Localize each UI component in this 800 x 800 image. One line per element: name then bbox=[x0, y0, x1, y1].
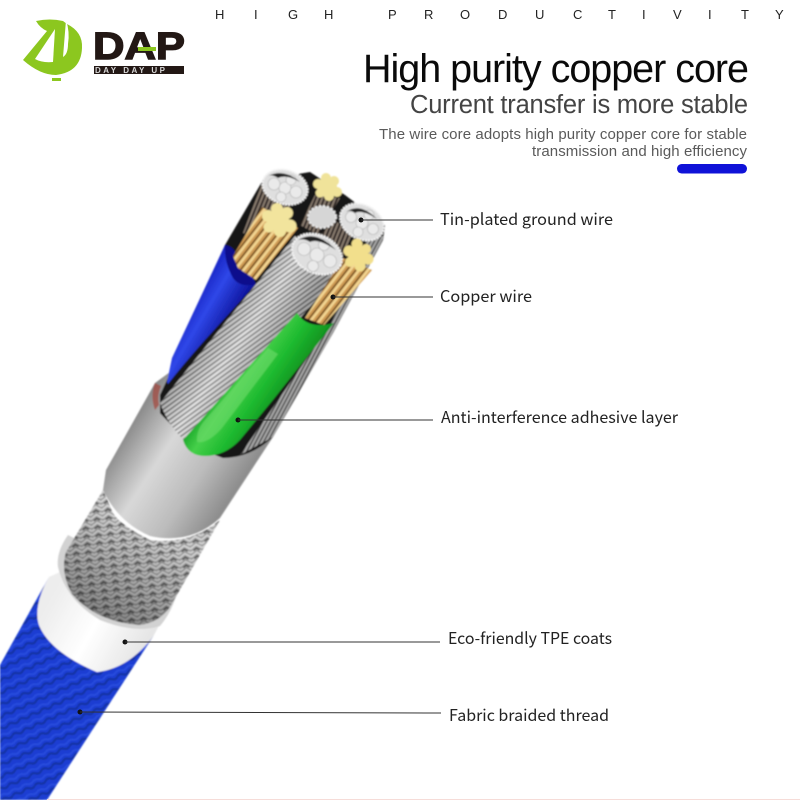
mesh shadow bbox=[64, 490, 220, 625]
logo tagline bar: DAY DAY UP bbox=[95, 66, 166, 75]
metal mesh shield bbox=[64, 490, 220, 625]
right twisted shielding strands bbox=[240, 230, 384, 455]
wire: blue insulation bbox=[167, 245, 256, 384]
green wire highlight bbox=[197, 348, 278, 442]
foil red rim bbox=[152, 383, 161, 410]
back silver wire bbox=[243, 180, 300, 240]
logo wordmark: DAP bbox=[93, 26, 185, 68]
gold strand section: rear bbox=[313, 173, 342, 201]
copper strands right bbox=[305, 258, 372, 325]
callout: eco-friendly TPE coats bbox=[122, 625, 612, 649]
subheading: Current transfer is more stable bbox=[410, 91, 748, 119]
callout: fabric braided thread bbox=[78, 702, 609, 726]
icon: green logo mark bbox=[23, 20, 82, 81]
callout: anti-interference adhesive layer: Anti-interference adhesive layer bbox=[441, 404, 679, 428]
callout: anti-interference adhesive layer bbox=[236, 404, 679, 428]
gold strand section: left bbox=[262, 203, 296, 237]
silver wire shade bbox=[160, 236, 342, 445]
heading: High purity copper core bbox=[363, 47, 749, 91]
callout: copper wire: Copper wire bbox=[440, 283, 532, 307]
wire: green insulation bbox=[183, 313, 334, 456]
silver strand section: rear bbox=[258, 164, 312, 210]
callout: fabric braided thread: Fabric braided thread bbox=[449, 702, 609, 726]
white TPE coat bbox=[37, 572, 178, 672]
blue wire opening bbox=[225, 245, 256, 285]
strands between centre and right wire bbox=[320, 220, 352, 262]
blue accent pill bbox=[677, 164, 747, 174]
logo accent dash bbox=[138, 47, 156, 51]
description: The wire core adopts high purity copper core for stable bbox=[379, 126, 747, 143]
callout: tin-plated ground wire bbox=[358, 206, 613, 230]
blue fabric braid bbox=[0, 577, 154, 800]
description: transmission and high efficiency bbox=[532, 143, 748, 160]
silver strand section: small centre bbox=[308, 206, 336, 228]
callout: eco-friendly TPE coats: Eco-friendly TPE coats bbox=[448, 625, 612, 649]
silver centre wire bbox=[160, 236, 342, 445]
cable cross-section illustration bbox=[0, 164, 390, 800]
rear copper and centre strands bbox=[300, 195, 340, 235]
dark wire bundle backing bbox=[160, 172, 385, 458]
callout: tin-plated ground wire: Tin-plated ground wire bbox=[440, 206, 613, 230]
gold strand section: right bbox=[344, 238, 374, 272]
silver strand section: right bbox=[334, 196, 390, 248]
TPE inner rim bbox=[58, 535, 178, 629]
top tagline: HIGH PRODUCTIVITY bbox=[215, 7, 784, 22]
copper strands left bbox=[233, 207, 298, 280]
silver foil layer bbox=[103, 350, 279, 538]
silver strand section: front bbox=[285, 226, 349, 282]
description bbox=[379, 126, 748, 160]
brand logo bbox=[23, 20, 185, 81]
callout: copper wire bbox=[330, 283, 532, 307]
